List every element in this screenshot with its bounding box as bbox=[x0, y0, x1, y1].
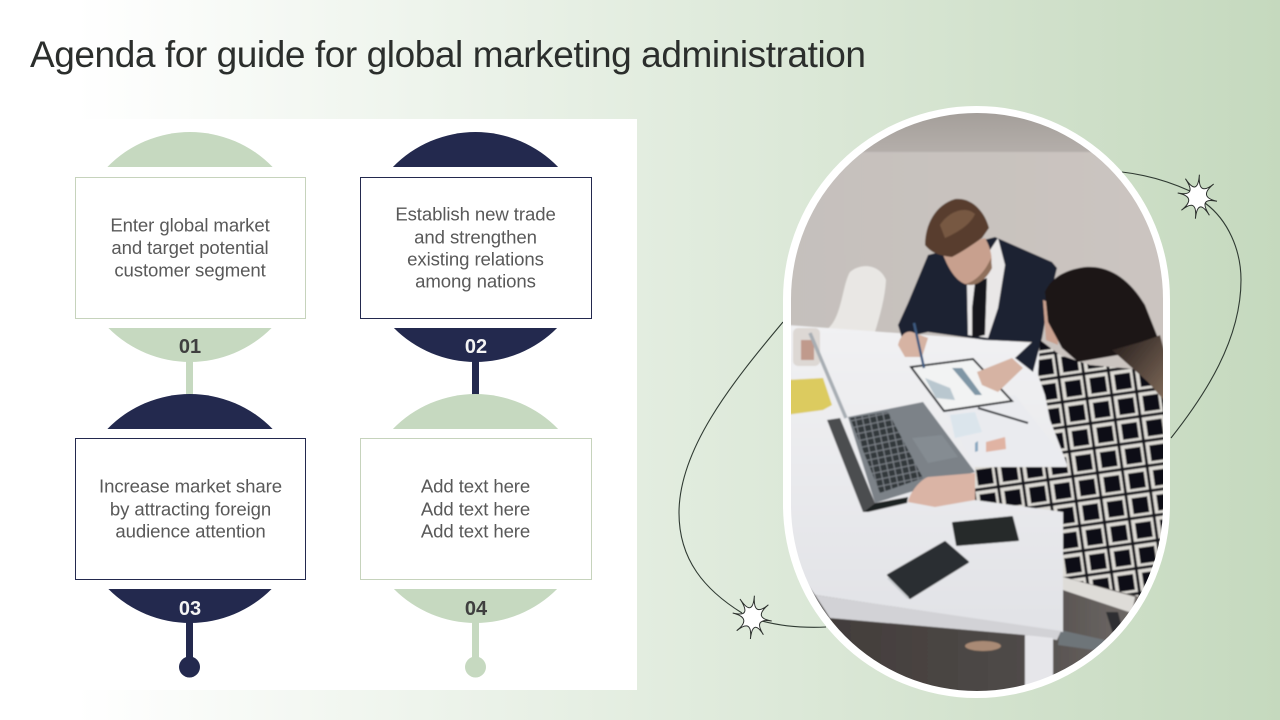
photo: business people at a table bbox=[786, 108, 1168, 698]
agenda item 01: and target potential bbox=[111, 237, 269, 258]
agenda item 03: audience attention bbox=[115, 520, 266, 542]
agenda item 01: customer segment bbox=[114, 260, 267, 280]
curved connector lines bbox=[679, 172, 1241, 627]
agenda item 04 bbox=[360, 394, 592, 678]
agenda item 02: 02 bbox=[465, 336, 487, 358]
agenda item 03 bbox=[76, 394, 306, 678]
agenda item 03: 03 bbox=[179, 598, 201, 620]
icon: star bottom left bbox=[733, 596, 772, 639]
agenda item 04: Add text here bbox=[421, 476, 530, 496]
agenda item 03: Increase market share bbox=[99, 476, 282, 496]
agenda item 02: existing relations bbox=[407, 248, 544, 270]
agenda item 04: Add text here bbox=[421, 498, 530, 520]
photo frame bbox=[783, 106, 1170, 698]
agenda item 01: Enter global market bbox=[110, 214, 271, 236]
agenda item 04: 04 bbox=[465, 598, 488, 620]
icon: star top right bbox=[1178, 175, 1217, 219]
agenda item 04: Add text here bbox=[421, 520, 530, 542]
agenda item 02 bbox=[360, 132, 592, 395]
agenda item 02: among nations bbox=[415, 270, 536, 292]
panel: agenda items bbox=[28, 119, 637, 690]
agenda item 01 bbox=[76, 132, 306, 395]
title: Agenda for guide for global marketing administration bbox=[30, 34, 866, 75]
agenda item 02: Establish new trade bbox=[395, 204, 556, 224]
agenda item 02: and strengthen bbox=[414, 226, 537, 248]
agenda item 01: 01 bbox=[179, 336, 201, 358]
agenda item 03: by attracting foreign bbox=[110, 498, 271, 520]
